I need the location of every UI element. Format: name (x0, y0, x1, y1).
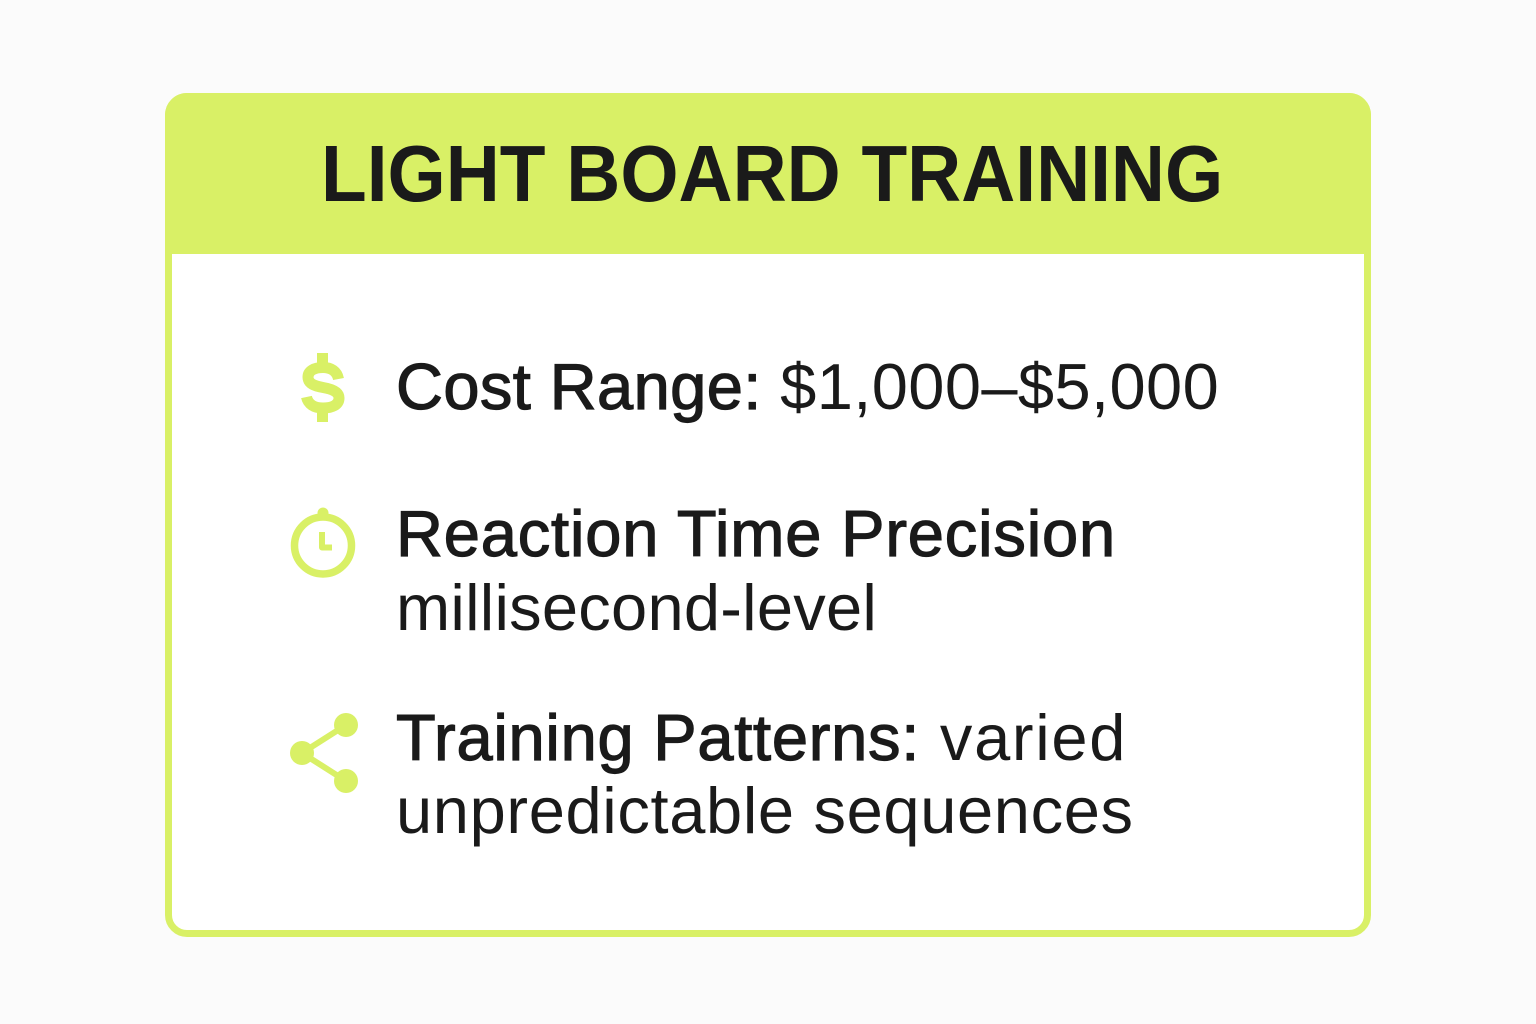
text: millisecond-level: millisecond-level (396, 571, 877, 644)
text: unpredictable sequences: unpredictable sequences (396, 774, 1134, 847)
title: LIGHT BOARD TRAINING (321, 129, 1223, 218)
panel: light board training card (165, 93, 1371, 937)
text: reaction time precision: Reaction Time Precision (396, 497, 1116, 570)
icon: stopwatch (290, 508, 356, 578)
text: cost range: Cost Range: $1,000–$5,000 (396, 350, 1219, 423)
icon: share nodes (290, 713, 358, 793)
text: training patterns: Training Patterns: varied (396, 701, 1127, 774)
icon: dollar sign (301, 353, 344, 422)
header band (165, 93, 1371, 254)
